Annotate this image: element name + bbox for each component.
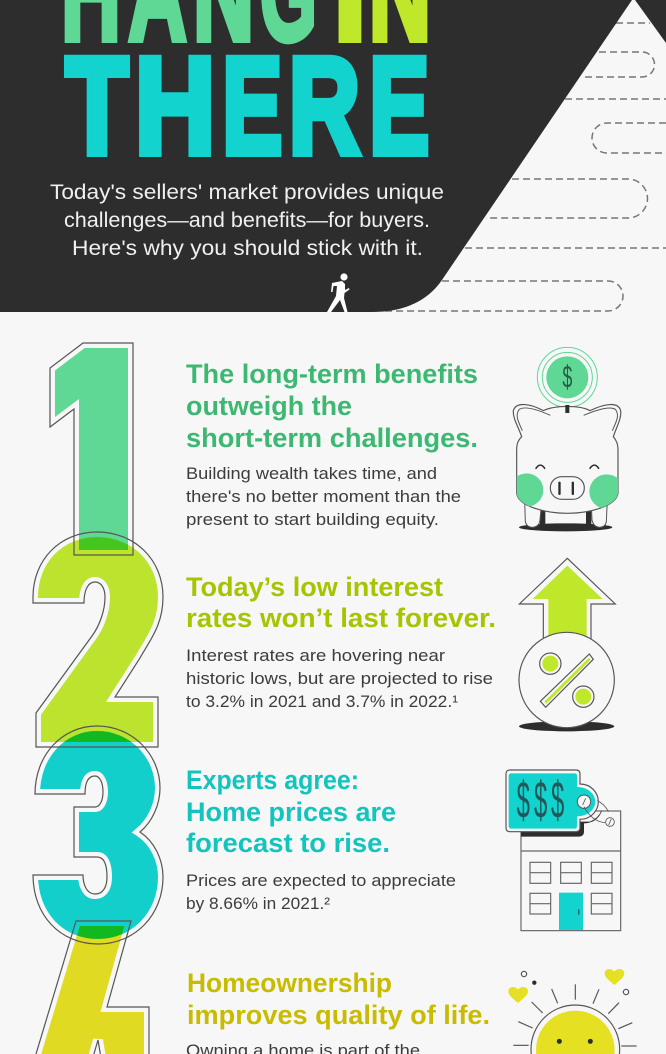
hearts and dots [508,969,629,1003]
heading 4 [187,968,490,1030]
price tag [506,770,598,832]
body 2: to 3.2% in 2021 and 3.7% in 2022.¹ [186,692,458,711]
title word: HANG [61,0,317,70]
ears inner [517,408,618,431]
icon: house with price tag [506,770,621,931]
subtitle: Here's why you should stick with it. [72,236,423,260]
title word: THERE: E [222,30,282,183]
coin [537,347,597,407]
title word: THERE: T [66,30,128,183]
slot [565,405,569,413]
snout [550,477,584,499]
title word: THERE: R [289,30,360,183]
title word: THERE: E [369,30,429,183]
percent coin [519,632,614,728]
body 3: by 8.66% in 2021.² [186,894,330,913]
sun [531,1005,620,1054]
eyes [536,465,599,468]
section 2 text [186,572,496,711]
tag string [584,801,614,826]
icon: walking person [327,273,350,312]
title word: THERE: H [135,30,215,183]
heading 4: improves quality of life. [187,1000,490,1030]
body 1: present to start building equity. [186,510,439,529]
body 2: Interest rates are hovering near [186,646,445,665]
numeral 1 [55,348,128,544]
heading 3: Experts agree: [186,765,359,795]
icon: piggy bank [510,347,624,531]
heading 3 [186,765,396,858]
title [61,0,431,183]
heading 2 [186,572,496,633]
heading 3: Home prices are [186,797,396,827]
arrow [519,558,615,643]
tag shadow [521,810,602,837]
body 1: Building wealth takes time, and [186,464,437,483]
section 1 text [186,359,478,529]
body 1: there's no better moment than the [186,487,461,506]
price tag: $ [534,770,547,828]
overlap 3 and 4 [76,926,124,939]
price tag: $ [517,770,530,828]
title word: IN [333,0,431,70]
subtitle: Today's sellers' market provides unique [50,180,444,204]
price tag: $ [551,770,564,828]
shadow [519,523,612,531]
house [521,811,621,931]
header panel [0,0,666,312]
body 2: historic lows, but are projected to rise [186,669,493,688]
title word: THERE [66,30,429,183]
heading 3: forecast to rise. [186,828,390,858]
heading 1 [186,359,478,453]
overlap 1 and 2 [79,537,128,550]
numeral outlines [33,343,163,1054]
body 3: Prices are expected to appreciate [186,871,456,890]
icon: smiling sun [508,969,637,1054]
legs [525,500,607,527]
heading 4: Homeownership [187,968,392,998]
numeral 3 [38,731,158,936]
coin: $ [562,360,572,395]
section 4 text [186,968,490,1054]
heading 2: rates won’t last forever. [186,603,496,633]
subtitle [50,180,444,260]
cheeks [516,473,618,508]
shadow [519,721,614,731]
body 3 [186,871,456,913]
door [559,893,583,930]
dashed mountain path [382,23,666,311]
icon: rising interest rate [519,558,615,731]
subtitle: challenges—and benefits—for buyers. [64,208,430,232]
heading 2: Today’s low interest [186,572,443,602]
body 2 [186,646,493,711]
big numerals [32,342,164,1054]
section 3 text [186,765,456,913]
dark corner right of the peak [635,0,666,43]
numeral 4 [41,926,144,1054]
overlap 2 and 3 [64,731,132,742]
numeral 2 [38,537,158,742]
body 1 [186,464,461,529]
rays [513,984,637,1046]
heading 1: outweigh the [186,391,352,421]
heading 1: The long-term benefits [186,359,478,389]
dark mountain shape [0,0,632,312]
body [513,405,621,513]
heading 1: short-term challenges. [186,423,478,453]
